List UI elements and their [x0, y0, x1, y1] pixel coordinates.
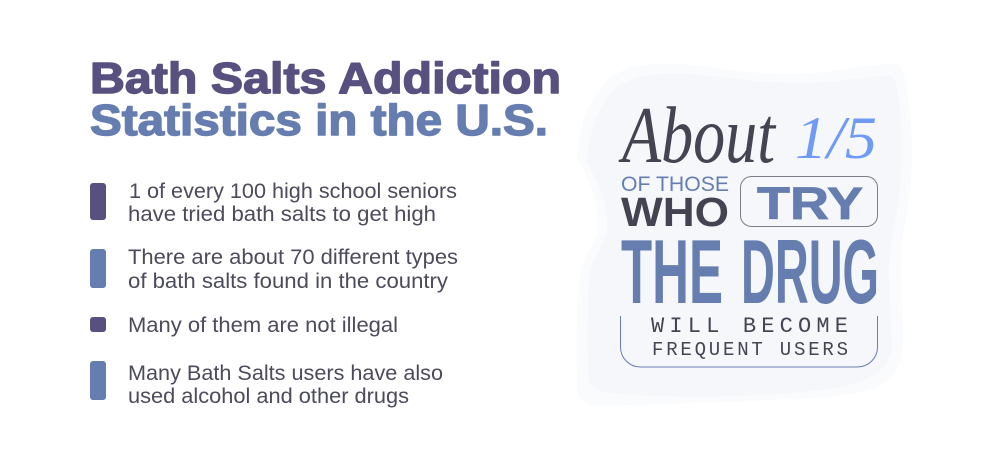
title — [90, 55, 561, 145]
background blob — [576, 64, 912, 405]
list item: types of bath salts: of bath salts found in the country — [128, 270, 449, 293]
text: of those: OF THOSE — [621, 173, 729, 196]
list item: other drugs: Many Bath Salts users have also — [128, 362, 443, 385]
list item: high school seniors: have tried bath salts to get high — [128, 203, 436, 226]
frame: will become frequent users: FREQUENT USERS — [652, 339, 848, 361]
text: the drug: THE — [621, 222, 723, 323]
list item: high school seniors — [90, 180, 457, 226]
text: the drug: DRUG — [741, 222, 879, 323]
text: 1/5: 1/5 — [795, 105, 877, 171]
box: try — [740, 176, 878, 229]
list item: other drugs — [90, 361, 443, 408]
title: Bath Salts Addiction — [90, 55, 561, 103]
text: About: About — [618, 92, 776, 180]
frame: will become frequent users — [620, 314, 878, 367]
list: statistics — [90, 180, 458, 408]
text: who: WHO — [621, 189, 729, 235]
list item: other drugs: used alcohol and other drugs — [128, 385, 409, 408]
list item: types of bath salts: There are about 70 different types — [128, 246, 458, 269]
frame: will become frequent users: WILL BECOME — [651, 314, 848, 339]
title: Statistics in the U.S. — [90, 97, 548, 145]
panel: quote — [576, 64, 912, 405]
list item: high school seniors: 1 of every 100 high school seniors — [129, 180, 457, 203]
box: try: TRY — [757, 178, 863, 229]
list item: types of bath salts — [90, 246, 458, 293]
list item: not illegal: Many of them are not illegal — [128, 314, 398, 337]
